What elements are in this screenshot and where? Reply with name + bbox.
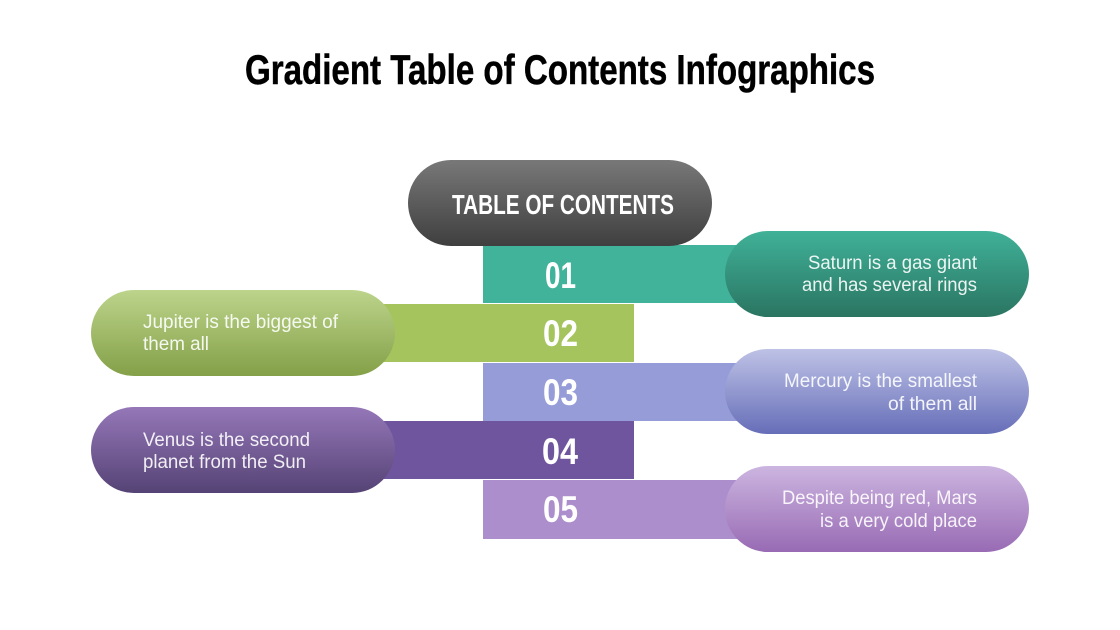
header pill: table of contents — [408, 160, 712, 246]
row 04 bar — [360, 421, 634, 479]
pill: Mars: Despite being red, Mars — [782, 488, 977, 509]
row 01 bar: 01 — [545, 255, 576, 296]
pill: Saturn — [725, 231, 1029, 317]
pill: Mars: is a very cold place — [820, 511, 977, 532]
row 03 bar — [483, 363, 763, 421]
row 05 bar: 05 — [543, 489, 578, 530]
pill: Saturn: and has several rings — [802, 275, 977, 296]
row 02 bar — [360, 304, 634, 362]
pill: Mercury: Mercury is the smallest — [784, 371, 978, 392]
pill: Jupiter: them all — [143, 334, 209, 355]
header pill: table of contents: TABLE OF CONTENTS — [452, 189, 674, 220]
row 04 bar: 04 — [542, 431, 578, 472]
row 05 bar — [483, 480, 763, 539]
pill: Jupiter — [91, 290, 395, 376]
row 03 bar: 03 — [543, 372, 578, 413]
pill: Saturn: Saturn is a gas giant — [808, 253, 978, 274]
pill: Mercury — [725, 349, 1029, 434]
pill: Venus: Venus is the second — [143, 430, 310, 451]
pill: Mercury: of them all — [888, 394, 977, 415]
pill: Mars — [725, 466, 1029, 552]
row 01 bar — [483, 245, 763, 303]
row 02 bar: 02 — [543, 313, 578, 354]
pill: Jupiter: Jupiter is the biggest of — [143, 312, 339, 333]
title: Gradient Table of Contents Infographics — [245, 46, 875, 93]
pill: Venus — [91, 407, 395, 493]
pill: Venus: planet from the Sun — [143, 452, 306, 473]
